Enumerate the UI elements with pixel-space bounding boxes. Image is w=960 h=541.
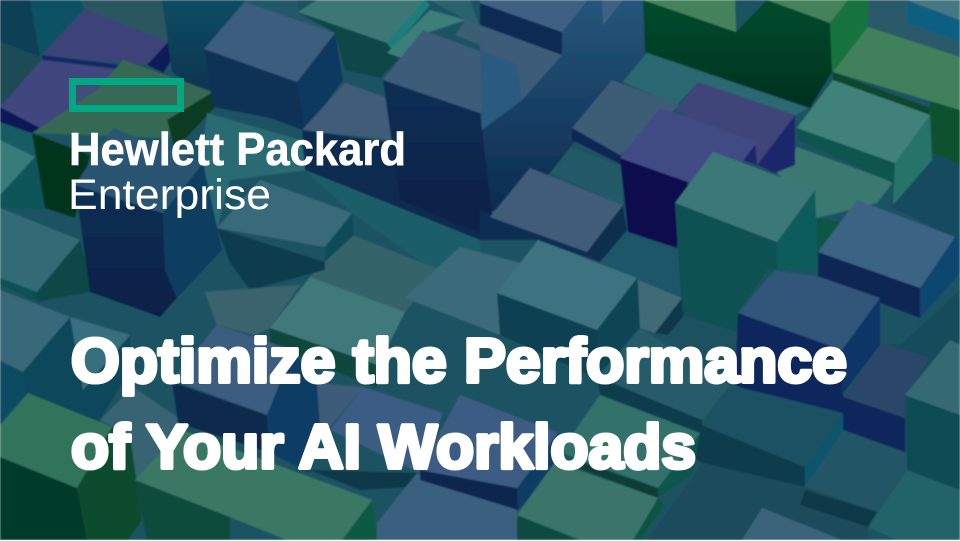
blocks: middle band	[0, 128, 960, 490]
blocks: bottom right	[377, 328, 960, 540]
logo: HPE green rectangle	[72, 82, 180, 108]
blocks: top right	[383, 0, 960, 333]
blocks: top left	[0, 0, 480, 275]
logo wordmark: Hewlett Packard: Hewlett Packard	[69, 123, 406, 175]
blocks: bottom left	[0, 277, 443, 540]
title	[71, 327, 847, 482]
title: Optimize the Performance	[71, 327, 847, 396]
title: of Your AI Workloads	[71, 413, 696, 482]
logo wordmark: Enterprise: Enterprise	[68, 171, 271, 219]
